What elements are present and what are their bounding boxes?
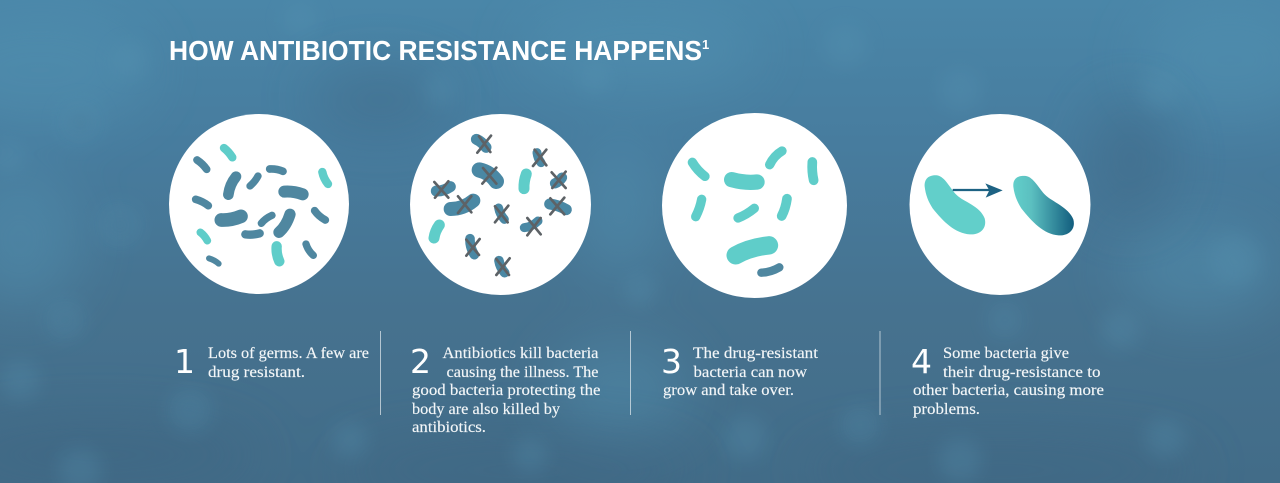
- description 2: good bacteria protecting the: [412, 382, 601, 399]
- description 4: their drug-resistance to: [943, 364, 1101, 381]
- panel 3: resistant bacteria take over: [662, 113, 847, 298]
- title: 1: [702, 37, 709, 52]
- panel 4: resistance transfer: [910, 114, 1090, 295]
- bacteria: mixed germs: [196, 148, 328, 264]
- description 3: bacteria can now: [694, 364, 808, 381]
- bacteria and arrow: gene transfer: [925, 175, 1074, 235]
- title: HOW ANTIBIOTIC RESISTANCE HAPPENS: [169, 35, 702, 66]
- bacteria: resistant: [692, 151, 814, 273]
- divider 3: [879, 331, 881, 415]
- step 3 text: [661, 342, 819, 399]
- divider 1: [380, 331, 382, 415]
- number 3: 3: [661, 342, 682, 381]
- bacterium: recipient changing colour: [1013, 176, 1074, 235]
- circle 2: [410, 114, 591, 295]
- description 4: other bacteria, causing more: [913, 382, 1104, 399]
- description 2: [412, 345, 601, 436]
- description 1: [208, 345, 369, 381]
- description 3: grow and take over.: [663, 382, 794, 399]
- step 2 text: [410, 342, 601, 436]
- description 3: [663, 345, 819, 399]
- number 4: 4: [911, 342, 932, 381]
- number 2: 2: [410, 342, 431, 381]
- panel 2: antibiotics kill bacteria: [410, 114, 591, 295]
- description 2: body are also killed by: [412, 401, 560, 418]
- description 1: Lots of germs. A few are: [208, 345, 369, 362]
- panel 1: lots of germs: [169, 114, 349, 294]
- step 1 text: [174, 342, 369, 381]
- bacteria: killed and surviving: [434, 136, 566, 275]
- step 4 text: [911, 342, 1104, 418]
- description 2: antibiotics.: [412, 419, 486, 436]
- description 4: Some bacteria give: [943, 345, 1069, 362]
- circle 4: [910, 114, 1090, 295]
- number 1: 1: [174, 342, 195, 381]
- arrow: [953, 183, 1003, 198]
- description 1: drug resistant.: [208, 364, 305, 381]
- description 4: [913, 345, 1104, 418]
- description 2: Antibiotics kill bacteria: [442, 345, 599, 362]
- divider 2: [630, 331, 632, 415]
- description 3: The drug-resistant: [693, 345, 819, 362]
- description 2: causing the illness. The: [446, 364, 599, 381]
- description 4: problems.: [913, 401, 980, 418]
- circle 3: [662, 113, 847, 298]
- bacterium: donor: [925, 175, 985, 234]
- circle 1: [169, 114, 349, 294]
